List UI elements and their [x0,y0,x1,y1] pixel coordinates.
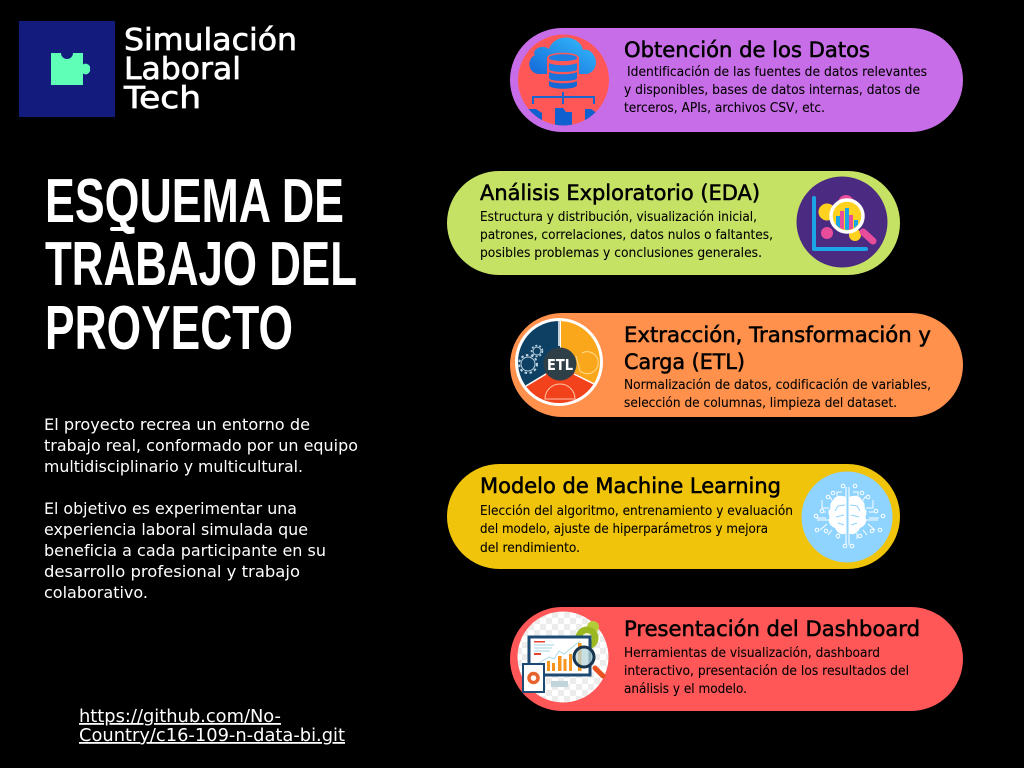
brand name: Simulación [124,23,297,58]
description: del rendimiento. [480,541,580,556]
intro text [44,415,358,602]
description: patrones, correlaciones, datos nulos o faltantes, [480,228,773,243]
brand name [123,23,297,116]
panel: ETL [510,313,963,417]
heading: Modelo de Machine Learning [480,474,781,498]
description: del modelo, ajuste de hiperparámetros y mejora [480,522,768,537]
heading: Obtención de los Datos [624,38,870,62]
heading: Análisis Exploratorio (EDA) [480,181,760,205]
icon: dashboard monitor [518,612,608,702]
icon: cloud database [518,34,609,130]
panel: análisis exploratorio [447,171,900,275]
description [624,646,909,697]
description: terceros, APIs, archivos CSV, etc. [624,101,825,116]
intro text: colaborativo. [44,583,148,602]
intro text: experiencia laboral simulada que [44,520,308,539]
icon: ETL wheel: ETL [547,356,573,374]
repository link: https://github.com/No- [79,706,281,727]
icon: chart with magnifier [796,176,888,268]
description: posibles problemas y conclusiones generales. [480,246,762,261]
repository link: Country/c16-109-n-data-bi.git [79,725,345,746]
intro text: beneficia a cada participante en su [44,541,326,560]
intro text: desarrollo profesional y trabajo [44,562,300,581]
icon: ETL wheel [515,318,603,406]
description: Estructura y distribución, visualización inicial, [480,210,757,225]
brand name: Laboral [124,52,241,87]
description: Herramientas de visualización, dashboard [624,646,880,661]
panel: obtención de los datos [510,28,963,132]
description: análisis y el modelo. [624,682,747,697]
heading: Presentación del Dashboard [624,617,920,641]
intro text: El objetivo es experimentar una [44,499,297,518]
icon: circuit brain [802,472,892,562]
panel: dashboard [510,607,963,711]
brand name: Tech [123,81,201,116]
icon: puzzle piece [51,53,90,85]
logo square [19,21,115,117]
description: selección de columnas, limpieza del dataset. [624,396,897,411]
description [480,504,793,556]
intro text: El proyecto recrea un entorno de [44,415,310,434]
heading: Carga (ETL) [624,350,745,374]
title: TRABAJO DEL [45,230,357,299]
description [624,65,927,116]
logo [19,21,115,117]
heading: Extracción, Transformación y [624,323,931,347]
intro text: multidisciplinario y multicultural. [44,457,303,476]
description [624,378,931,411]
panel: machine learning [447,464,900,569]
description: Elección del algoritmo, entrenamiento y evaluación [480,504,793,519]
title: ESQUEMA DE [45,167,344,236]
description: Identificación de las fuentes de datos relevantes [627,65,927,80]
description [480,210,773,261]
intro text: trabajo real, conformado por un equipo [44,436,358,455]
title [45,167,357,363]
description: y disponibles, bases de datos internas, datos de [624,83,920,98]
description: interactivo, presentación de los resultados del [624,664,909,679]
repository link [79,706,345,746]
description: Normalización de datos, codificación de variables, [624,378,931,393]
title: PROYECTO [45,294,293,363]
heading [624,323,931,374]
